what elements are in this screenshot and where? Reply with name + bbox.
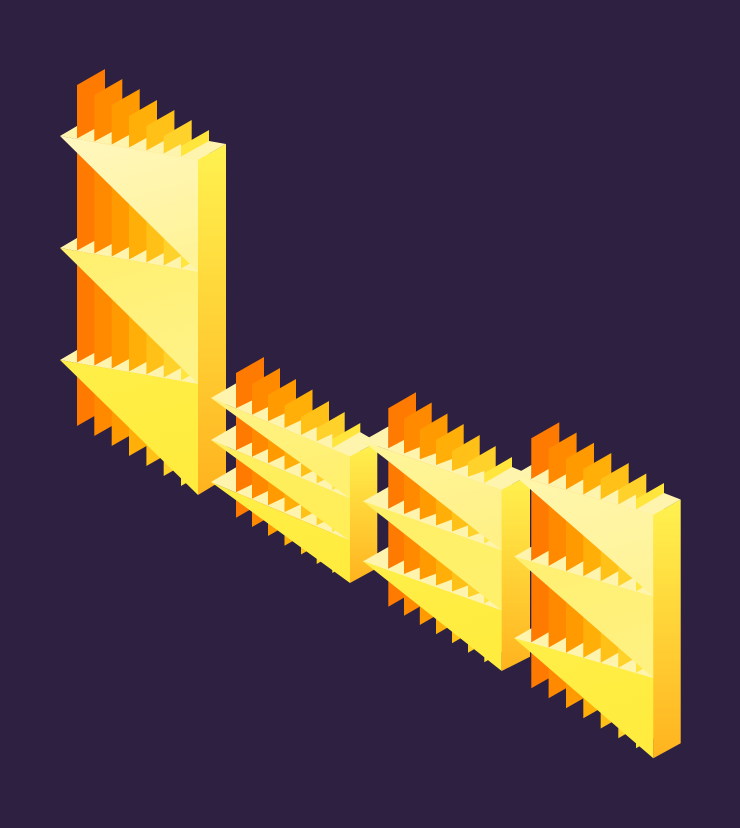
block 3: medium column — [363, 392, 530, 671]
block 4 top layer — [514, 465, 681, 596]
block 1 middle layer — [60, 238, 198, 384]
block 2 top layer — [211, 383, 377, 498]
block 3 orange bars — [388, 392, 512, 662]
block 1: tall column — [60, 69, 226, 495]
block 3 middle layer — [363, 487, 502, 610]
block 4 orange bars — [531, 422, 664, 748]
block 1 top layer — [60, 126, 226, 272]
block 4 middle layer — [514, 547, 653, 678]
block 2 right face — [350, 442, 377, 583]
block 3 right face — [502, 474, 530, 671]
block 2 orange bars — [236, 357, 360, 573]
block 1 bottom layer — [60, 350, 198, 495]
block 4 bottom layer — [514, 628, 653, 758]
block 4: tall right column — [514, 422, 681, 758]
block 1 right face — [198, 144, 226, 495]
block 2: short column — [211, 357, 377, 583]
block 3 top layer — [363, 426, 530, 550]
block 4 right face — [653, 500, 681, 758]
block 2 bottom layer — [211, 467, 350, 583]
block 3 bottom layer — [363, 547, 502, 671]
block 2 middle layer — [211, 425, 350, 541]
block 1 orange bars — [77, 69, 209, 486]
